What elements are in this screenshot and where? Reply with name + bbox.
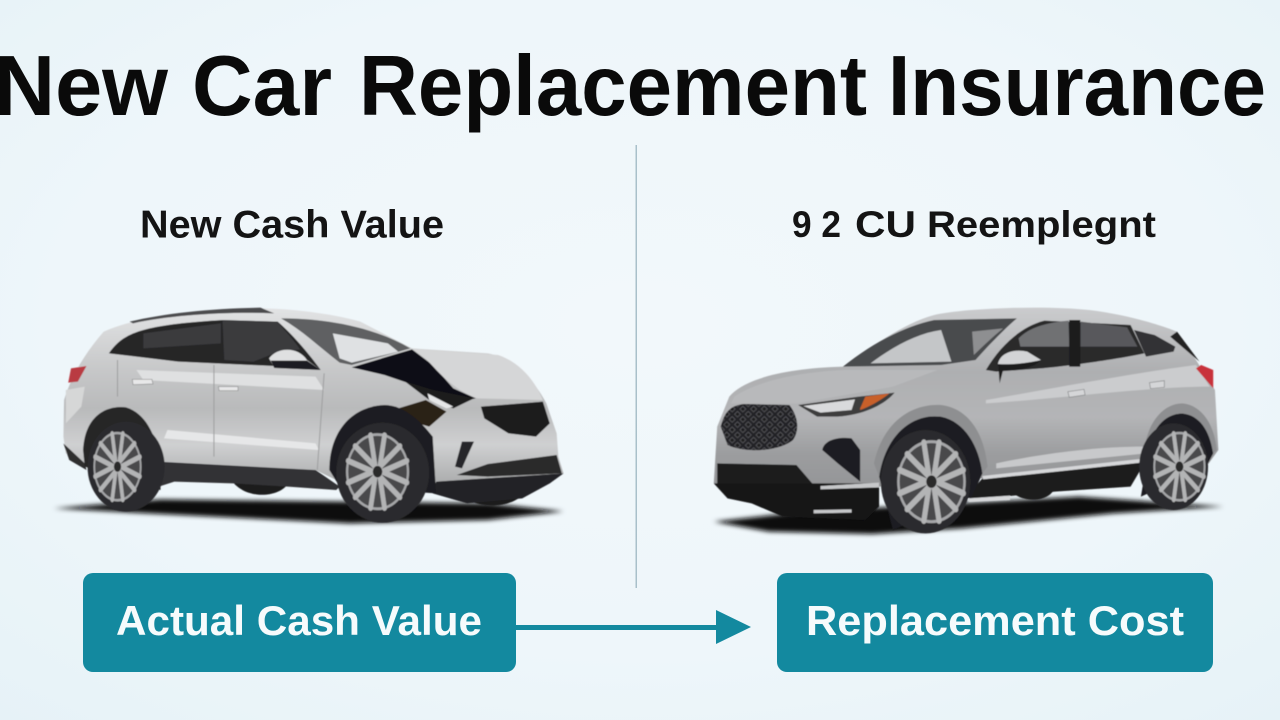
mirror <box>998 351 1041 383</box>
body shell <box>714 308 1218 490</box>
hood highlight <box>731 370 938 403</box>
right heading: 9 2 <box>792 204 841 245</box>
rear wheel arch <box>1141 413 1213 497</box>
front wheel <box>336 423 429 523</box>
rear bumper <box>63 443 86 470</box>
rear spoiler edge <box>1170 332 1199 362</box>
windshield <box>281 318 410 365</box>
right heading: CU <box>855 204 916 245</box>
button: actual cash value <box>83 573 516 672</box>
broken headlight <box>398 400 446 427</box>
lower bumper intake <box>717 463 814 485</box>
mirror <box>269 350 321 370</box>
ground shadow <box>714 497 1224 534</box>
side skirt <box>969 460 1148 500</box>
lower intake <box>457 455 562 477</box>
sill <box>159 462 340 490</box>
title <box>0 39 1266 134</box>
right heading: Reemplegnt <box>927 204 1156 245</box>
centre divider <box>636 145 637 588</box>
body shell <box>63 308 564 490</box>
title: Insurance <box>888 39 1266 134</box>
rear wheel arch <box>83 407 161 490</box>
front wheel <box>881 430 970 533</box>
title: Replacement <box>359 39 867 134</box>
front wheel arch <box>329 405 436 493</box>
illustration: new silver SUV <box>714 308 1224 534</box>
ground shadow <box>54 499 564 523</box>
windshield <box>843 318 1017 367</box>
exposed grille <box>481 402 550 437</box>
front lip <box>714 483 879 520</box>
grille <box>721 404 797 450</box>
door highlight <box>986 365 1210 403</box>
tail lamp <box>68 366 86 383</box>
arrow <box>516 610 751 644</box>
rear wheel <box>1139 423 1208 510</box>
button: actual cash value: Actual Cash Value <box>116 597 482 644</box>
title: Car <box>192 39 332 134</box>
door handles <box>1068 381 1164 397</box>
fog light <box>455 442 474 468</box>
body highlights <box>136 370 324 390</box>
crumpled hood crevice <box>352 349 476 403</box>
door handles <box>132 379 238 391</box>
front wheel arch <box>879 416 982 530</box>
skirt trim <box>969 458 1147 502</box>
button: replacement cost: Replacement Cost <box>806 597 1184 644</box>
tail lamp <box>1196 365 1213 388</box>
door seams <box>117 360 324 470</box>
far side wheels <box>1010 488 1055 500</box>
side windows <box>986 321 1144 372</box>
crumpled hood <box>413 348 543 400</box>
roof rail <box>130 308 274 323</box>
side windows <box>109 320 321 370</box>
rear quarter window <box>1134 330 1175 357</box>
side intake <box>822 438 860 482</box>
right heading <box>792 204 1156 245</box>
left heading: New Cash Value <box>140 204 444 246</box>
rear wheel <box>88 422 165 512</box>
illustration: damaged silver SUV <box>54 308 564 523</box>
far side wheels <box>231 480 526 506</box>
headlight <box>798 393 895 417</box>
front lip <box>433 473 564 503</box>
button: replacement cost <box>777 573 1213 672</box>
